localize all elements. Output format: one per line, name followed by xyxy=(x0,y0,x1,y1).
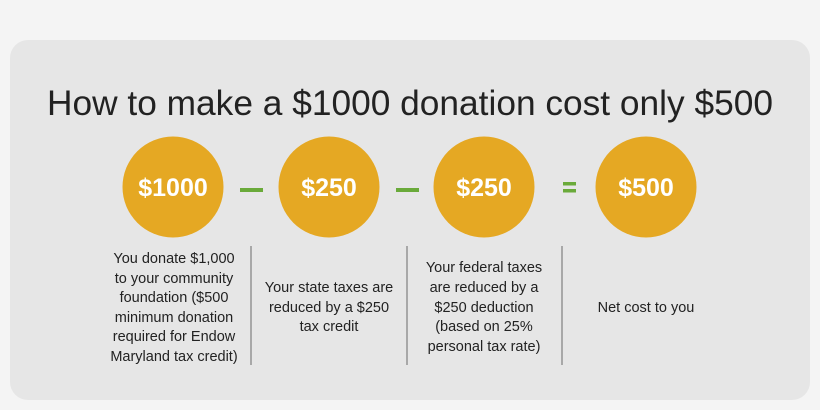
text: state taxes: reduced by a $250 xyxy=(269,300,389,316)
text: net cost: Net cost to you xyxy=(598,300,694,316)
text: state taxes: tax credit xyxy=(300,319,358,335)
text: state taxes: Your state taxes are xyxy=(265,280,393,296)
minus sign 1 xyxy=(240,188,263,192)
circle: $500: $500 xyxy=(618,174,674,202)
text: federal taxes: Your federal taxes xyxy=(426,260,542,276)
circle: $250 state xyxy=(278,136,380,238)
circle: $1000 xyxy=(122,136,224,238)
circle: $500 xyxy=(596,136,696,238)
text: federal taxes: $250 deduction xyxy=(434,300,534,316)
equals sign xyxy=(563,182,576,192)
text: federal taxes: are reduced by a xyxy=(430,280,539,296)
text: donation description: foundation ($500 xyxy=(120,290,228,306)
text: donation description: required for Endow xyxy=(113,329,236,345)
text: federal taxes: personal tax rate) xyxy=(428,339,540,355)
circle: $250 federal: $250 xyxy=(456,174,512,202)
minus sign 2 xyxy=(396,188,419,192)
text: donation description: to your community xyxy=(115,271,234,287)
text: donation description: You donate $1,000 xyxy=(113,251,235,267)
circle: $250 state: $250 xyxy=(301,174,357,202)
text: donation description: Maryland tax credit) xyxy=(110,349,238,365)
title: How to make a $1000 donation cost only $500 xyxy=(47,84,773,123)
text: donation description: minimum donation xyxy=(115,310,233,326)
text: state taxes xyxy=(265,280,393,335)
circle: $1000: $1000 xyxy=(138,174,208,202)
text: federal taxes xyxy=(426,260,542,355)
text: donation description xyxy=(110,251,238,365)
text: federal taxes: (based on 25% xyxy=(435,319,533,335)
circle: $250 federal xyxy=(434,136,534,238)
